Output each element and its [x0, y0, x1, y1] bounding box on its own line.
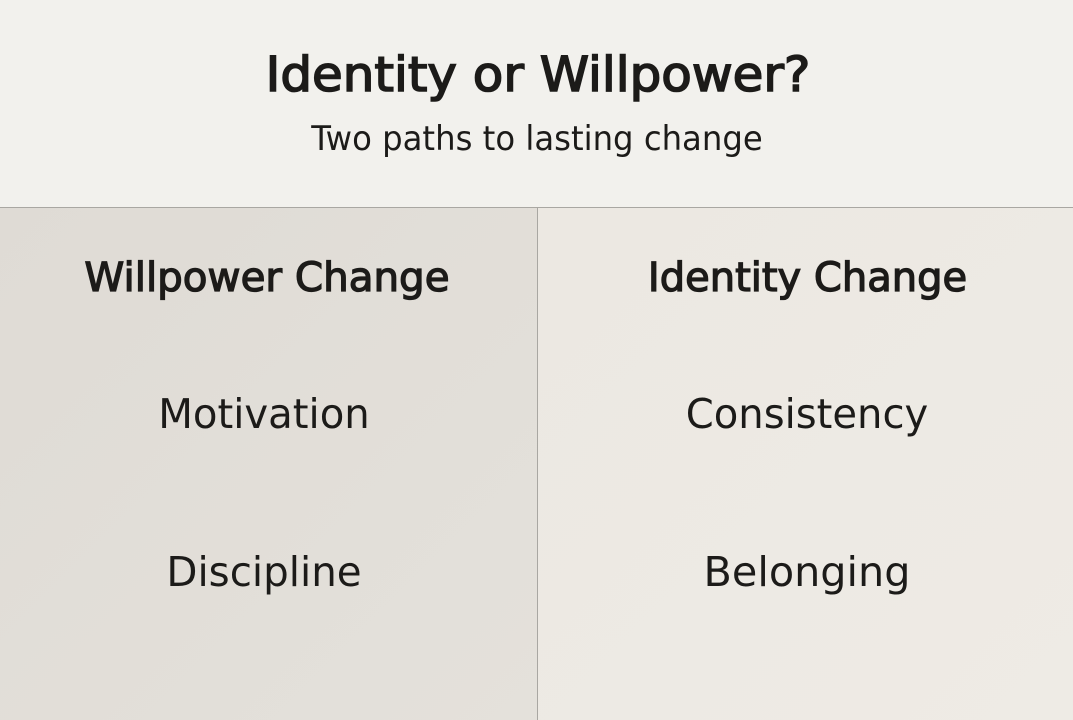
heading: identity change: Identity Change — [648, 255, 967, 301]
item: motivation: Motivation — [158, 390, 369, 438]
header panel — [0, 0, 1073, 207]
panel: willpower change — [0, 207, 537, 720]
panel: identity change — [537, 207, 1073, 720]
item: belonging: Belonging — [704, 548, 910, 596]
title: Identity or Willpower? — [265, 47, 810, 103]
item: discipline: Discipline — [166, 548, 361, 596]
subtitle: Two paths to lasting change — [311, 119, 763, 159]
item: consistency: Consistency — [686, 390, 928, 438]
heading: willpower change: Willpower Change — [84, 255, 450, 301]
